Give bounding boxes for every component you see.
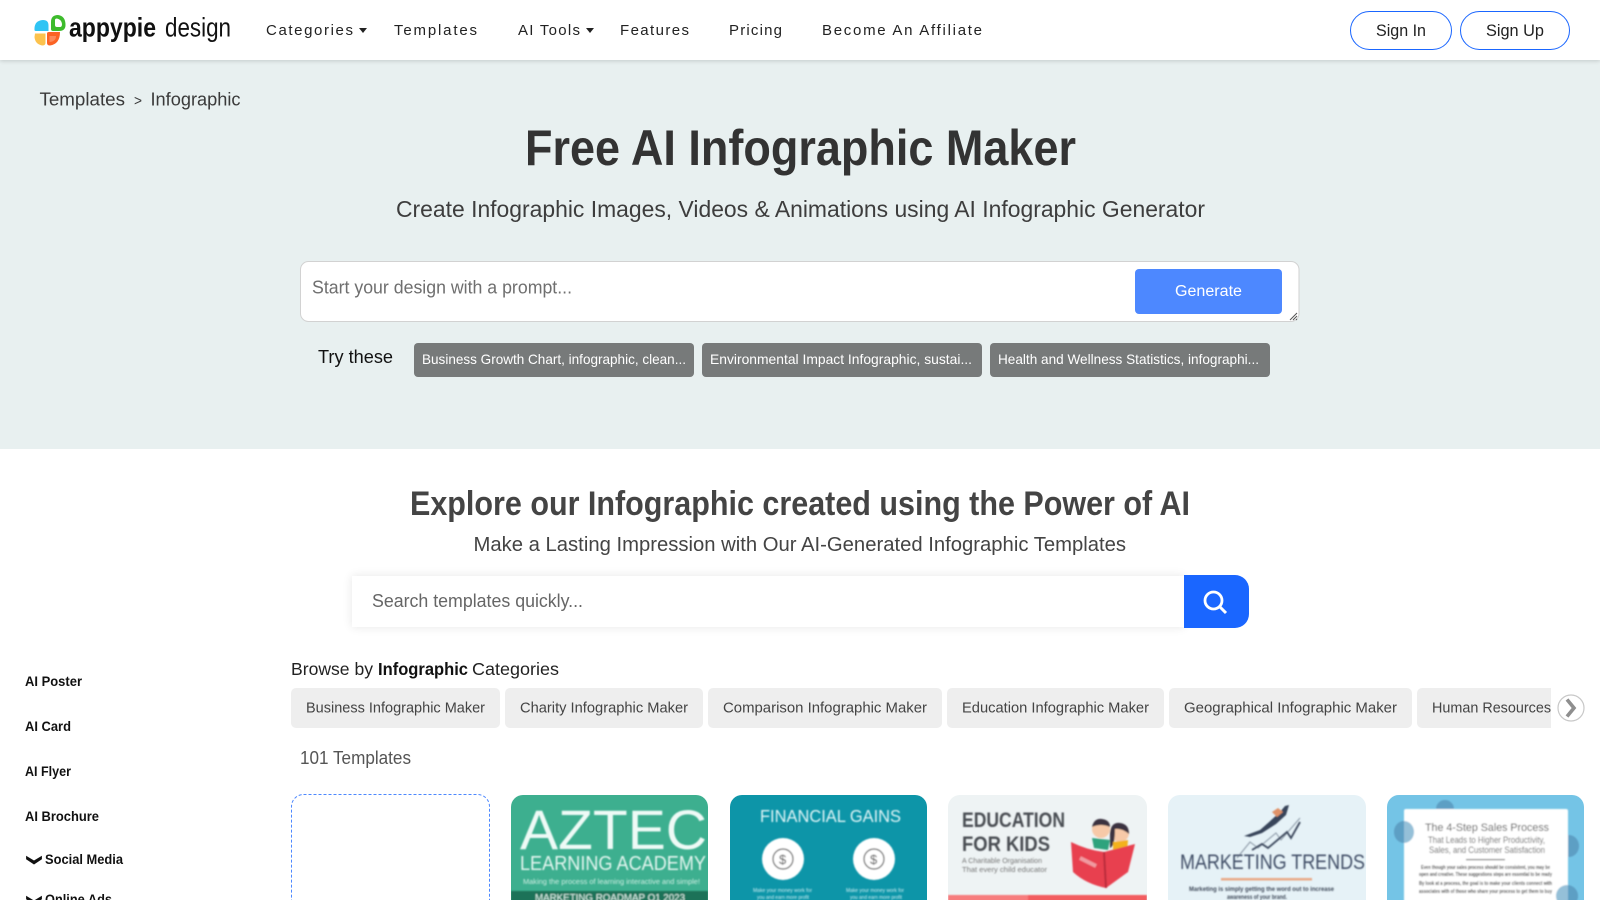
chip 3 <box>990 343 1270 377</box>
sign up button: Sign Up <box>1486 21 1544 40</box>
nav links: Categories <box>266 22 353 39</box>
generate button <box>1135 269 1282 314</box>
card: marketing trends: Marketing is simply getting the word out to increase <box>1189 886 1334 893</box>
education heading: EDUCATION <box>962 809 1065 832</box>
card: education for kids: That every child educator <box>962 867 1048 874</box>
sales heading: The 4-Step Sales Process <box>1425 822 1549 834</box>
card: financial gains <box>730 795 927 900</box>
sign up button <box>1460 12 1570 50</box>
sidebar menu: AI Brochure <box>25 808 99 824</box>
icon: magnifier <box>1205 592 1226 613</box>
sidebar menu <box>25 673 123 900</box>
wordmark <box>69 12 231 42</box>
breadcrumb <box>40 90 240 110</box>
hero background panel <box>0 60 1600 449</box>
title: Free AI Infographic Maker <box>525 120 1076 176</box>
card: aztec learning academy: Making the process of learning interactive and simple! <box>523 879 700 886</box>
search bar <box>352 575 1249 628</box>
nav links: Templates <box>394 22 477 39</box>
icon: kids reading book <box>1071 819 1135 888</box>
header bar shadow <box>0 56 1600 61</box>
icon: coin left: $ <box>779 852 787 867</box>
card: 4-step sales process: By look at a process, the goal is to make your clients connect with <box>1419 881 1552 887</box>
breadcrumb: > <box>134 92 142 110</box>
nav links: AI Tools <box>518 22 580 39</box>
card: financial gains: Make your money work for <box>753 888 812 894</box>
category chip: human resources: Human Resources <box>1432 700 1551 716</box>
category chip: business <box>291 688 500 728</box>
breadcrumb: Infographic <box>150 90 240 110</box>
browse heading: Categories <box>472 659 559 679</box>
category chips <box>291 688 1584 728</box>
card: 4-step sales process: That Leads to Higher Productivity, <box>1428 835 1545 845</box>
chip 1 <box>414 343 694 377</box>
category chip: comparison <box>708 688 942 728</box>
search button <box>1184 575 1249 628</box>
suggestion chips <box>414 343 1270 377</box>
template count: 101 Templates <box>300 748 411 768</box>
wordmark: design <box>165 12 231 42</box>
chip 3: Health and Wellness Statistics, infographi... <box>998 351 1259 367</box>
aztec heading: AZTEC <box>520 798 707 861</box>
card: marketing trends <box>1168 795 1366 900</box>
icon: coin right <box>853 838 895 880</box>
sign in button: Sign In <box>1376 21 1426 40</box>
category chip: charity <box>505 688 703 728</box>
category chip: geographical <box>1169 688 1412 728</box>
marketing heading: MARKETING TRENDS <box>1180 851 1365 874</box>
icon: logo petals <box>34 15 66 46</box>
try these label: Try these <box>318 347 393 367</box>
card: financial gains: Make your money work for <box>846 888 904 894</box>
sidebar menu: AI Poster <box>25 673 83 689</box>
browse heading: Infographic <box>378 659 468 679</box>
resize grip <box>1290 313 1297 320</box>
chip 2: Environmental Impact Infographic, sustai... <box>710 351 972 367</box>
academy subtitle: LEARNING ACADEMY <box>520 853 706 875</box>
subtitle: Create Infographic Images, Videos & Animations using AI Infographic Generator <box>396 196 1205 222</box>
search placeholder: Search templates quickly... <box>372 591 583 611</box>
card: 4-step sales process: Even though your sales process should be consistent, you may be <box>1421 865 1550 871</box>
generate button: Generate <box>1175 283 1242 300</box>
card: education for kids: FOR KIDS <box>962 833 1050 856</box>
category chip: charity: Charity Infographic Maker <box>520 700 688 716</box>
icon: coin right: $ <box>870 852 878 867</box>
card: 4-step sales process: open and creative. These suggestions steps are essential to be ready <box>1419 872 1552 878</box>
category chip: education: Education Infographic Maker <box>962 700 1149 716</box>
financial heading: FINANCIAL GAINS <box>760 806 901 826</box>
header navigation <box>0 0 1600 60</box>
explore heading: Explore our Infographic created using the Power of AI <box>410 485 1190 523</box>
browse heading: Browse by <box>291 659 373 679</box>
prompt box <box>300 262 1299 322</box>
card: blank dashed template <box>292 794 490 900</box>
sidebar menu: AI Flyer <box>25 763 71 779</box>
card: 4-step sales process: Sales, and Customer Satisfaction <box>1429 845 1545 855</box>
category chip: business: Business Infographic Maker <box>306 700 485 716</box>
chip 2 <box>702 343 982 377</box>
nav links: Features <box>620 22 689 39</box>
browse heading <box>291 659 559 679</box>
card: 4-step sales process <box>1387 795 1584 900</box>
card: education for kids: A Charitable Organisation <box>962 858 1042 865</box>
prompt placeholder: Start your design with a prompt... <box>312 278 572 298</box>
explore subheading: Make a Lasting Impression with Our AI-Generated Infographic Templates <box>474 534 1126 556</box>
sidebar menu: Social Media <box>45 851 123 867</box>
card: aztec learning academy <box>511 795 708 900</box>
red band <box>948 895 1147 900</box>
icon: coin left <box>762 838 804 880</box>
category chip: education <box>947 688 1164 728</box>
sign in button <box>1350 12 1452 50</box>
breadcrumb: Templates <box>40 90 125 110</box>
nav links: Become An Affiliate <box>822 22 982 39</box>
category chip: human resources <box>1417 688 1551 728</box>
category chip: comparison: Comparison Infographic Maker <box>723 700 927 716</box>
next arrow <box>1558 695 1584 721</box>
sidebar menu: AI Card <box>25 718 71 734</box>
logo <box>34 12 231 46</box>
category chip: geographical: Geographical Infographic Maker <box>1184 700 1397 716</box>
nav links: Pricing <box>729 22 782 39</box>
nav links <box>266 22 982 39</box>
card: 4-step sales process: associates with of those who share your process to get them to buy <box>1419 889 1552 895</box>
card: education for kids <box>948 795 1147 900</box>
wordmark: appypie <box>69 12 156 42</box>
icon: superhero with rising arrow <box>1237 805 1300 858</box>
chip 1: Business Growth Chart, infographic, clean... <box>422 351 686 367</box>
